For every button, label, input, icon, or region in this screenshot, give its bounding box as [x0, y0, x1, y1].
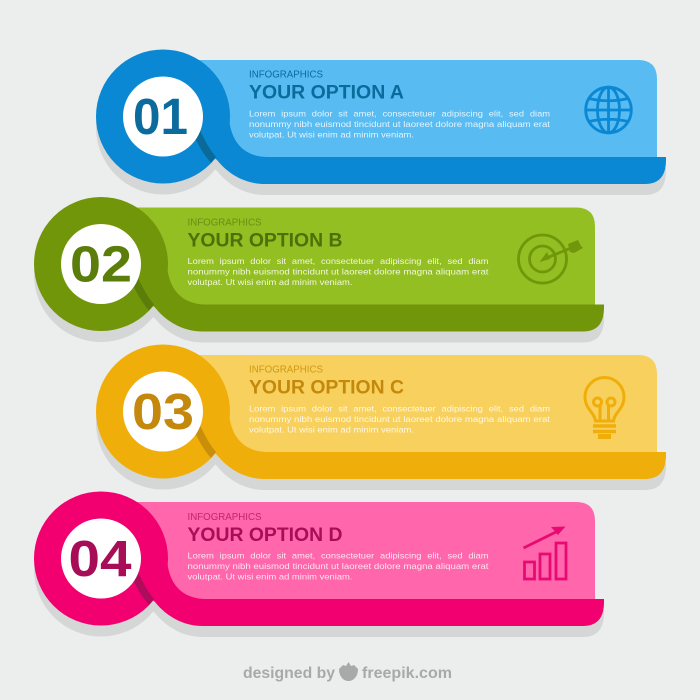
icon: target with arrow — [518, 235, 583, 283]
body text: nonummy nibh euismod tincidunt ut laoreet dolore magna aliquam erat — [249, 119, 551, 129]
label: INFOGRAPHICS — [188, 512, 262, 523]
number badge 01 — [123, 76, 203, 156]
number badge 04: 04 — [68, 530, 132, 587]
icon: globe — [586, 87, 631, 133]
body text: nonummy nibh euismod tincidunt ut laoreet dolore magna aliquam erat — [188, 561, 489, 571]
number badge 03: 03 — [132, 383, 194, 440]
body text: Lorem ipsum dolor sit amet, consectetuer adipiscing elit, sed diam — [188, 550, 488, 560]
body text: nonummy nibh euismod tincidunt ut laoreet dolore magna aliquam erat — [188, 266, 489, 276]
panel: option B — [34, 197, 604, 342]
label: INFOGRAPHICS — [249, 364, 323, 376]
number badge 03 — [123, 372, 203, 452]
body text: Lorem ipsum dolor sit amet, consectetuer adipiscing elit, sed diam — [249, 108, 550, 118]
body text — [249, 108, 551, 140]
panel: option D — [34, 492, 604, 637]
heading: YOUR OPTION D — [188, 525, 342, 546]
footer credit: freepik.com — [362, 665, 452, 682]
body text: volutpat. Ut wisi enim ad minim veniam. — [188, 572, 352, 582]
body text — [188, 256, 489, 287]
footer credit — [243, 662, 452, 682]
number badge 02 — [61, 224, 141, 304]
panel: option C — [96, 344, 666, 490]
icon: freepik logo — [339, 662, 358, 681]
body text — [249, 404, 551, 434]
body text — [188, 550, 489, 582]
icon: rising bar chart — [524, 526, 566, 579]
body text: volutpat. Ut wisi enim ad minim veniam. — [249, 130, 414, 140]
body text: Lorem ipsum dolor sit amet, consectetuer adipiscing elit, sed diam — [249, 404, 550, 414]
number badge 02: 02 — [70, 236, 132, 292]
label: INFOGRAPHICS — [249, 70, 323, 80]
heading: YOUR OPTION C — [249, 378, 404, 398]
heading: YOUR OPTION A — [249, 82, 404, 104]
number badge 01: 01 — [133, 88, 188, 145]
body text: volutpat. Ut wisi enim ad minim veniam. — [188, 277, 352, 287]
footer credit: designed by — [243, 665, 335, 682]
body text: Lorem ipsum dolor sit amet, consectetuer adipiscing elit, sed diam — [188, 256, 488, 266]
number badge 04 — [61, 518, 141, 598]
icon: light bulb — [585, 378, 624, 439]
panel: option A — [96, 50, 666, 195]
body text: volutpat. Ut wisi enim ad minim veniam. — [249, 424, 414, 434]
heading: YOUR OPTION B — [188, 230, 342, 252]
label: INFOGRAPHICS — [188, 218, 262, 228]
body text: nonummy nibh euismod tincidunt ut laoreet dolore magna aliquam erat — [249, 414, 551, 424]
